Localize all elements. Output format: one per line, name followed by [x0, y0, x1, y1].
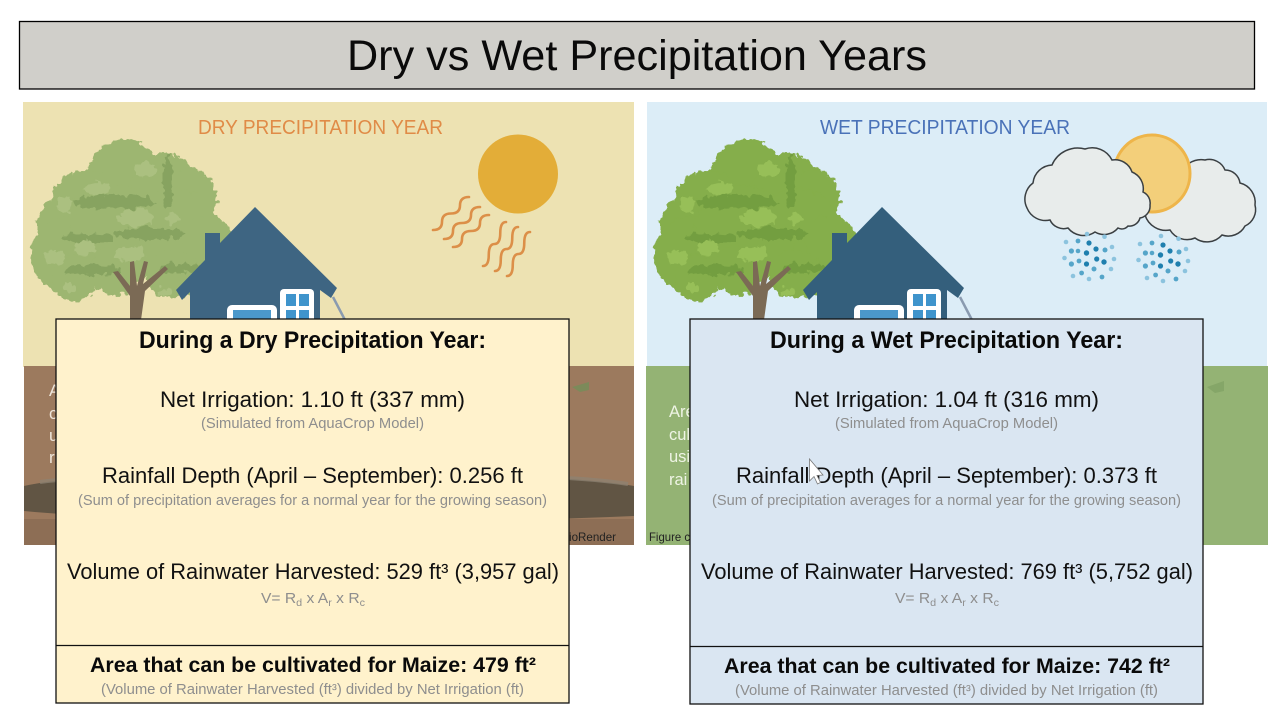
heading: During a Dry Precipitation Year: [139, 327, 486, 354]
volume formula: d [930, 598, 936, 609]
volume formula: V= R [261, 591, 294, 607]
ground text fragments: Are [669, 403, 695, 421]
heading: During a Wet Precipitation Year: [770, 327, 1123, 354]
icon: tree [654, 140, 857, 320]
panel: dry illustration [23, 102, 634, 545]
volume harvested: Volume of Rainwater Harvested: 529 ft³ (3,957 gal) [67, 559, 559, 584]
icon: sun [478, 134, 558, 214]
panel: wet illustration [646, 102, 1268, 545]
volume formula: d [296, 598, 302, 609]
dry cracked ground [24, 366, 634, 545]
panel heading: dry: DRY PRECIPITATION YEAR [198, 117, 443, 139]
volume formula: r [328, 598, 333, 609]
icon: heat waves [433, 197, 530, 276]
title banner: Dry vs Wet Precipitation Years [347, 32, 927, 80]
figure credit: Figure c [649, 530, 690, 544]
volume formula: c [994, 598, 999, 609]
ground text fragments: c [49, 404, 58, 423]
net irrigation note: (Simulated from AquaCrop Model) [835, 416, 1058, 432]
ground text fragments: r [49, 448, 55, 467]
rainfall depth: Rainfall Depth (April – September): 0.256 ft [102, 463, 523, 488]
figure credit: ioRender [569, 530, 616, 544]
ground text fragments: rai [669, 471, 687, 489]
icon: rear cloud [1145, 159, 1256, 242]
ground text fragments: A [49, 381, 61, 400]
ground text fragments: usi [669, 448, 690, 466]
net irrigation: Net Irrigation: 1.10 ft (337 mm) [160, 387, 465, 412]
panel heading: wet: WET PRECIPITATION YEAR [820, 117, 1070, 139]
volume formula: V= R [895, 591, 928, 607]
panel: wet year calculations [690, 319, 1203, 704]
volume formula: x R [966, 591, 994, 607]
icon: house [803, 207, 972, 325]
ground text fragments [669, 403, 695, 489]
volume formula: x A [936, 591, 963, 607]
volume formula: c [360, 598, 365, 609]
cultivated area: Area that can be cultivated for Maize: 742 ft² [724, 655, 1170, 678]
volume formula: x R [332, 591, 360, 607]
net irrigation: Net Irrigation: 1.04 ft (316 mm) [794, 387, 1099, 412]
net irrigation note: (Simulated from AquaCrop Model) [201, 416, 424, 432]
icon: house [176, 207, 345, 325]
area note: (Volume of Rainwater Harvested (ft³) divided by Net Irrigation (ft) [735, 683, 1158, 699]
dry sky [23, 102, 634, 367]
title banner [20, 22, 1254, 89]
ground text fragments: cul [669, 426, 690, 444]
wet green ground [646, 366, 1268, 545]
icon: sun behind clouds [1114, 135, 1190, 212]
icon: tree [31, 140, 234, 320]
ground text fragments: u [49, 426, 58, 445]
icon: rain dots left [1062, 232, 1116, 281]
volume harvested: Volume of Rainwater Harvested: 769 ft³ (5,752 gal) [701, 559, 1193, 584]
icon: rain dots right [1136, 234, 1190, 283]
rainfall note: (Sum of precipitation averages for a normal year for the growing season) [712, 493, 1181, 509]
volume formula: x A [302, 591, 329, 607]
volume formula: r [962, 598, 967, 609]
rainfall depth: Rainfall Depth (April – September): 0.373 ft [736, 463, 1157, 488]
panel: dry year calculations [56, 319, 569, 703]
wet sky [647, 102, 1267, 367]
cultivated area: Area that can be cultivated for Maize: 479 ft² [90, 654, 536, 677]
icon: mouse cursor [810, 459, 823, 484]
rainfall note: (Sum of precipitation averages for a normal year for the growing season) [78, 493, 547, 509]
ground text fragments [49, 381, 61, 467]
area note: (Volume of Rainwater Harvested (ft³) divided by Net Irrigation (ft) [101, 682, 524, 698]
icon: front cloud [1025, 148, 1150, 236]
